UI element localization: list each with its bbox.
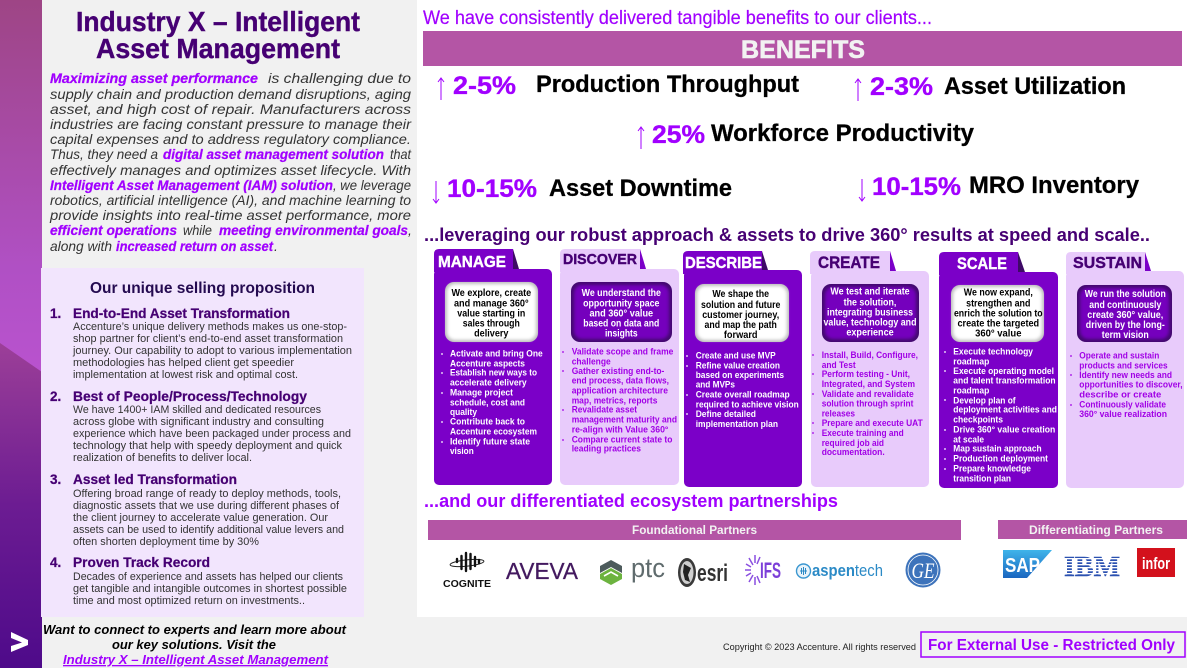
- list: describe activities: Create overall roadmap: [696, 389, 790, 400]
- card: describe: DESCRIBE: [685, 255, 762, 272]
- callout: sustain summary: driven by the long-: [1086, 320, 1165, 331]
- list: sustain activities: [1070, 350, 1183, 419]
- banner: differentiating partners: Differentiating Partners: [1029, 525, 1163, 537]
- list: manage activities: Identify future state: [450, 436, 530, 447]
- list: scale activities: Production deployment: [953, 453, 1048, 464]
- logo: ge: GE: [912, 558, 935, 583]
- logo: ibm: IBM: [1064, 552, 1120, 583]
- callout: create summary: value, technology and: [824, 317, 916, 328]
- list: manage activities: Manage project: [450, 386, 513, 397]
- list: create activities: releases: [822, 407, 855, 418]
- callout: manage summary: value starting in: [457, 308, 525, 320]
- list: discover activities: end process, data flows,: [572, 375, 669, 386]
- usp item 3: Asset led Transformation: [73, 472, 237, 487]
- metric: mro inventory: [859, 172, 1140, 201]
- card: manage: [434, 249, 552, 485]
- list: discover activities: re-align with Value 360°: [572, 423, 669, 434]
- card: sustain: [1066, 252, 1184, 488]
- intro paragraph: capital expenses and to address regulatory compliance.: [50, 131, 411, 147]
- card: scale: SCALE: [957, 254, 1007, 273]
- list: discover activities: leading practices: [572, 443, 641, 454]
- logo: infor: [1137, 548, 1175, 577]
- list: create activities: solution through sprint: [822, 398, 913, 409]
- list: scale activities: and talent transformation: [953, 375, 1056, 386]
- approach heading: ...leveraging our robust approach & assets to drive 360° results at speed and scale..: [424, 224, 1150, 245]
- usp item 2: 2.: [50, 389, 61, 404]
- list: discover activities: Compare current state to: [572, 433, 673, 444]
- intro paragraph: .: [274, 238, 278, 254]
- callout: describe summary: We shape the: [712, 289, 769, 300]
- callout: discover summary: We understand the: [582, 288, 661, 299]
- callout: scale summary: enrich the solution to: [954, 309, 1043, 320]
- logo: esri: [678, 558, 728, 587]
- callout: scale summary: strengthen and: [966, 299, 1030, 310]
- benefits banner: [423, 31, 1182, 66]
- callout: manage summary: and manage 360°: [454, 298, 529, 310]
- card: discover: DISCOVER: [563, 252, 638, 268]
- list: describe activities: required to achieve vision: [696, 399, 799, 410]
- list: create activities: documentation.: [822, 446, 885, 457]
- callout: manage summary: [445, 282, 538, 342]
- list: manage activities: accelerate delivery: [450, 377, 527, 388]
- usp item 2: across globe with significant industry and consulting: [73, 416, 324, 428]
- benefits banner: BENEFITS: [741, 36, 865, 64]
- card: manage: MANAGE: [438, 254, 506, 271]
- list: scale activities: [944, 346, 1057, 484]
- card: create: [810, 251, 929, 487]
- callout: manage summary: sales through: [463, 318, 520, 330]
- metric: asset utilization: Asset Utilization: [944, 73, 1126, 100]
- logo: ge: [906, 552, 940, 588]
- callout: create summary: [822, 284, 919, 342]
- benefits lead-in heading: We have consistently delivered tangible benefits to our clients...: [423, 8, 932, 29]
- list: create activities: and Test: [822, 359, 856, 370]
- intro paragraph: Maximizing asset performance: [50, 70, 258, 86]
- intro paragraph: meeting environmental goals: [219, 222, 408, 238]
- card: describe: [683, 251, 802, 487]
- callout: describe summary: solution and future: [701, 300, 781, 311]
- panel: unique selling proposition: [41, 268, 364, 617]
- list: scale activities: Map sustain approach: [953, 443, 1042, 454]
- metric: asset downtime: [433, 175, 732, 203]
- card: create: CREATE: [818, 253, 880, 272]
- list: manage activities: quality: [450, 406, 478, 417]
- partnerships heading: ...and our differentiated ecosystem partnerships: [424, 490, 838, 511]
- restricted use badge: For External Use - Restricted Only: [928, 637, 1175, 654]
- usp heading: Our unique selling proposition: [90, 280, 315, 297]
- intro paragraph: industries are facing constant pressure to manage their: [50, 116, 412, 132]
- list: discover activities: Validate scope and frame: [572, 346, 673, 357]
- usp item 3: often shorten deployment time by 30%: [73, 536, 259, 548]
- usp item 2: realization of benefits to deliver local.: [73, 452, 252, 464]
- usp item 4: [50, 555, 347, 607]
- intro paragraph: ,: [408, 222, 412, 238]
- restricted use badge: [921, 632, 1185, 657]
- intro paragraph: effectively manages and optimizes asset lifecycle. With: [50, 162, 411, 178]
- intro paragraph: increased return on asset: [116, 238, 274, 254]
- card: scale: [939, 252, 1058, 488]
- list: scale activities: at scale: [953, 434, 984, 445]
- usp item 3: 3.: [50, 472, 61, 487]
- call to action text: our key solutions. Visit the: [112, 637, 277, 652]
- callout: describe summary: [695, 284, 789, 342]
- intro paragraph: , we leverage: [333, 177, 411, 193]
- logo: cognite: COGNITE: [443, 579, 491, 590]
- callout: create summary: integrating business: [827, 307, 913, 318]
- callout: manage summary: delivery: [474, 328, 509, 340]
- list: sustain activities: 360° value realization: [1079, 408, 1167, 419]
- logo: infor: infor: [1142, 554, 1170, 573]
- callout: scale summary: 360° value: [975, 329, 1022, 340]
- usp item 1: implementation at lowest risk and optimal cost.: [73, 369, 298, 381]
- usp item 4: get tangible and intangible outcomes in shortest possible: [73, 583, 347, 595]
- callout: create summary: experience: [846, 327, 894, 338]
- usp item 4: Proven Track Record: [73, 555, 210, 570]
- callout: describe summary: and map the path: [705, 320, 777, 331]
- usp item 1: shop partner for client’s end-to-end asset transformation: [73, 333, 343, 345]
- list: sustain activities: Operate and sustain: [1079, 350, 1160, 361]
- usp item 4: time and most optimized return on investments..: [73, 595, 305, 607]
- list: manage activities: [441, 348, 543, 456]
- list: create activities: Install, Build, Configure,: [822, 349, 918, 360]
- banner: foundational partners: [428, 520, 961, 540]
- list: scale activities: Execute technology: [953, 346, 1034, 357]
- list: manage activities: schedule, cost and: [450, 396, 525, 407]
- list: sustain activities: Continuously validate: [1079, 399, 1166, 410]
- left gradient strip: [0, 0, 42, 668]
- list: manage activities: Contribute back to: [450, 416, 525, 427]
- usp item 1: methodologies has helped client get speedier: [73, 357, 294, 369]
- list: scale activities: Drive 360° value creation: [953, 424, 1056, 435]
- callout: discover summary: insights: [605, 329, 638, 340]
- list: manage activities: Establish new ways to: [450, 367, 537, 378]
- list: manage activities: vision: [450, 445, 474, 456]
- metric: production throughput: Production Throughput: [536, 71, 799, 98]
- list: scale activities: Execute operating model: [953, 365, 1054, 376]
- logo: cognite: [443, 553, 491, 590]
- intro paragraph: robotics, artificial intelligence (AI), and machine learning to: [50, 192, 411, 208]
- list: describe activities: Refine value creation: [696, 360, 780, 371]
- usp item 2: [50, 389, 351, 464]
- usp item 1: End-to-End Asset Transformation: [73, 306, 290, 321]
- list: describe activities: based on experiments: [696, 369, 784, 380]
- intro paragraph: efficient operations: [50, 222, 177, 238]
- callout: sustain summary: [1077, 285, 1172, 342]
- callout: scale summary: create the targeted: [957, 319, 1039, 330]
- metric: production throughput: 2-5%: [453, 72, 516, 100]
- list: create activities: [812, 349, 923, 457]
- usp item 1: journey. Our capability to adopt to various implementation: [72, 345, 352, 357]
- banner: foundational partners: Foundational Partners: [632, 525, 757, 537]
- call to action text: [43, 622, 347, 667]
- copyright: Copyright © 2023 Accenture. All rights reserved: [723, 642, 916, 653]
- callout: sustain summary: create 360° value,: [1087, 310, 1163, 321]
- metric: asset utilization: [855, 73, 1126, 101]
- title: Asset Management: [96, 33, 340, 64]
- list: describe activities: and MVPs: [696, 379, 735, 390]
- metric: asset utilization: 2-3%: [870, 73, 933, 101]
- title: [76, 6, 360, 64]
- list: describe activities: implementation plan: [696, 418, 778, 429]
- metric: workforce productivity: Workforce Productivity: [711, 120, 975, 147]
- list: sustain activities: Identify new needs and: [1079, 369, 1172, 380]
- list: scale activities: roadmap: [953, 385, 990, 396]
- list: scale activities: checkpoints: [953, 414, 1003, 425]
- callout: discover summary: and 360° value: [589, 309, 653, 320]
- callout: describe summary: customer journey,: [702, 310, 779, 321]
- logo: sap: SAP: [1005, 555, 1040, 577]
- list: discover activities: challenge: [572, 356, 611, 367]
- list: scale activities: transition plan: [953, 473, 1011, 484]
- usp item 3: assets can be used to identify additional value levers and: [73, 524, 344, 536]
- list: sustain activities: products and services: [1079, 360, 1168, 371]
- usp item 1: 1.: [50, 306, 61, 321]
- metric: asset downtime: Asset Downtime: [549, 175, 732, 202]
- list: scale activities: Prepare knowledge: [953, 463, 1031, 474]
- callout: manage summary: We explore, create: [451, 288, 531, 299]
- list: create activities: Perform testing - Unit,: [822, 368, 910, 379]
- callout: discover summary: based on data and: [583, 319, 659, 330]
- list: discover activities: map, metrics, reports: [572, 395, 657, 406]
- usp item 3: diagnostic assets that we use during different phases of: [73, 500, 340, 512]
- usp item 2: experience which have been packaged under process and: [73, 428, 351, 440]
- icon: accenture arrow: [11, 632, 28, 652]
- metric: production throughput: [438, 71, 799, 100]
- usp item 3: the client journey to accelerate value generation. Our: [73, 512, 328, 524]
- callout: discover summary: [571, 282, 672, 342]
- card: discover: [560, 249, 679, 485]
- list: describe activities: Create and use MVP: [696, 350, 776, 361]
- usp item 4: 4.: [50, 555, 61, 570]
- logo: ptc: ptc: [631, 553, 665, 583]
- list: manage activities: Accenture aspects: [450, 357, 525, 368]
- intro paragraph: Intelligent Asset Management (IAM) solution: [50, 177, 333, 193]
- list: describe activities: [686, 350, 799, 429]
- list: create activities: Prepare and execute UAT: [822, 417, 923, 428]
- callout: scale summary: [951, 285, 1044, 342]
- intro paragraph: while: [183, 222, 212, 238]
- intro paragraph: is challenging due to: [268, 70, 411, 86]
- intro paragraph: Thus, they need a: [50, 146, 158, 162]
- usp item 2: technology that help with speedy deployment and quick: [73, 440, 342, 452]
- callout: describe summary: forward: [724, 330, 758, 341]
- logo: sap: [1003, 550, 1052, 578]
- logo: ifs: [745, 555, 781, 585]
- logo: aspentech: aspentech: [812, 561, 883, 580]
- logo: aveva: AVEVA: [506, 558, 579, 584]
- callout: scale summary: We now expand,: [964, 288, 1033, 299]
- call to action text: Industry X – Intelligent Asset Management: [63, 652, 329, 667]
- usp item 4: Decades of experience and assets has helped our clients: [73, 571, 343, 583]
- list: manage activities: Accenture ecosystem: [450, 426, 537, 437]
- metric: workforce productivity: 25%: [652, 121, 705, 149]
- callout: discover summary: opportunity space: [583, 299, 660, 310]
- intro paragraph: asset, and high cost of repair. Manufacturers across: [50, 101, 411, 117]
- list: describe activities: Define detailed: [696, 408, 756, 419]
- callout: sustain summary: We run the solution: [1085, 289, 1166, 300]
- metric: mro inventory: MRO Inventory: [969, 172, 1140, 199]
- metric: asset downtime: 10-15%: [447, 175, 537, 203]
- logo: ifs: IFS: [760, 558, 781, 583]
- callout: create summary: We test and iterate: [830, 286, 910, 297]
- logo: ptc: [600, 553, 665, 585]
- intro paragraph: digital asset management solution: [163, 146, 384, 162]
- list: sustain activities: describe or create: [1079, 389, 1161, 400]
- usp item 2: Best of People/Process/Technology: [73, 389, 307, 404]
- list: scale activities: roadmap: [953, 356, 990, 367]
- banner: differentiating partners: [998, 520, 1187, 539]
- intro paragraph: supply chain and production demand disruptions, aging: [50, 86, 411, 102]
- intro paragraph: provide insights into real-time asset performance, more: [49, 207, 411, 223]
- list: manage activities: Activate and bring One: [450, 348, 543, 359]
- list: create activities: Execute training and: [822, 427, 904, 438]
- intro paragraph: along with: [50, 238, 112, 254]
- usp item 3: [50, 472, 344, 548]
- list: discover activities: application architecture: [572, 385, 668, 396]
- list: create activities: required job aid: [822, 437, 884, 448]
- usp item 1: Accenture’s unique delivery methods makes us one-stop-: [73, 321, 347, 333]
- card: sustain: SUSTAIN: [1073, 255, 1142, 272]
- list: discover activities: management maturity and: [572, 414, 677, 425]
- usp item 2: We have 1400+ IAM skilled and dedicated resources: [73, 404, 321, 416]
- usp item 3: Offering broad range of ready to deploy methods, tools,: [73, 488, 341, 500]
- title: Industry X – Intelligent: [76, 6, 360, 37]
- usp item 1: [50, 306, 352, 381]
- callout: sustain summary: term vision: [1102, 330, 1149, 341]
- call to action text: Want to connect to experts and learn more about: [43, 622, 347, 637]
- list: create activities: Integrated, and System: [822, 378, 915, 389]
- list: discover activities: Gather existing end-to-: [572, 365, 664, 376]
- logo: esri: esri: [697, 560, 728, 587]
- intro paragraph: that: [390, 146, 412, 162]
- callout: sustain summary: and continuously: [1089, 300, 1162, 311]
- list: create activities: Validate and revalidate: [822, 388, 914, 399]
- metric: mro inventory: 10-15%: [872, 173, 961, 201]
- list: discover activities: Revalidate asset: [572, 404, 637, 415]
- list: scale activities: deployment activities and: [953, 404, 1057, 415]
- intro paragraph: [49, 70, 412, 254]
- callout: create summary: the solution,: [844, 297, 896, 308]
- list: scale activities: Develop plan of: [953, 395, 1016, 406]
- list: discover activities: [562, 346, 677, 454]
